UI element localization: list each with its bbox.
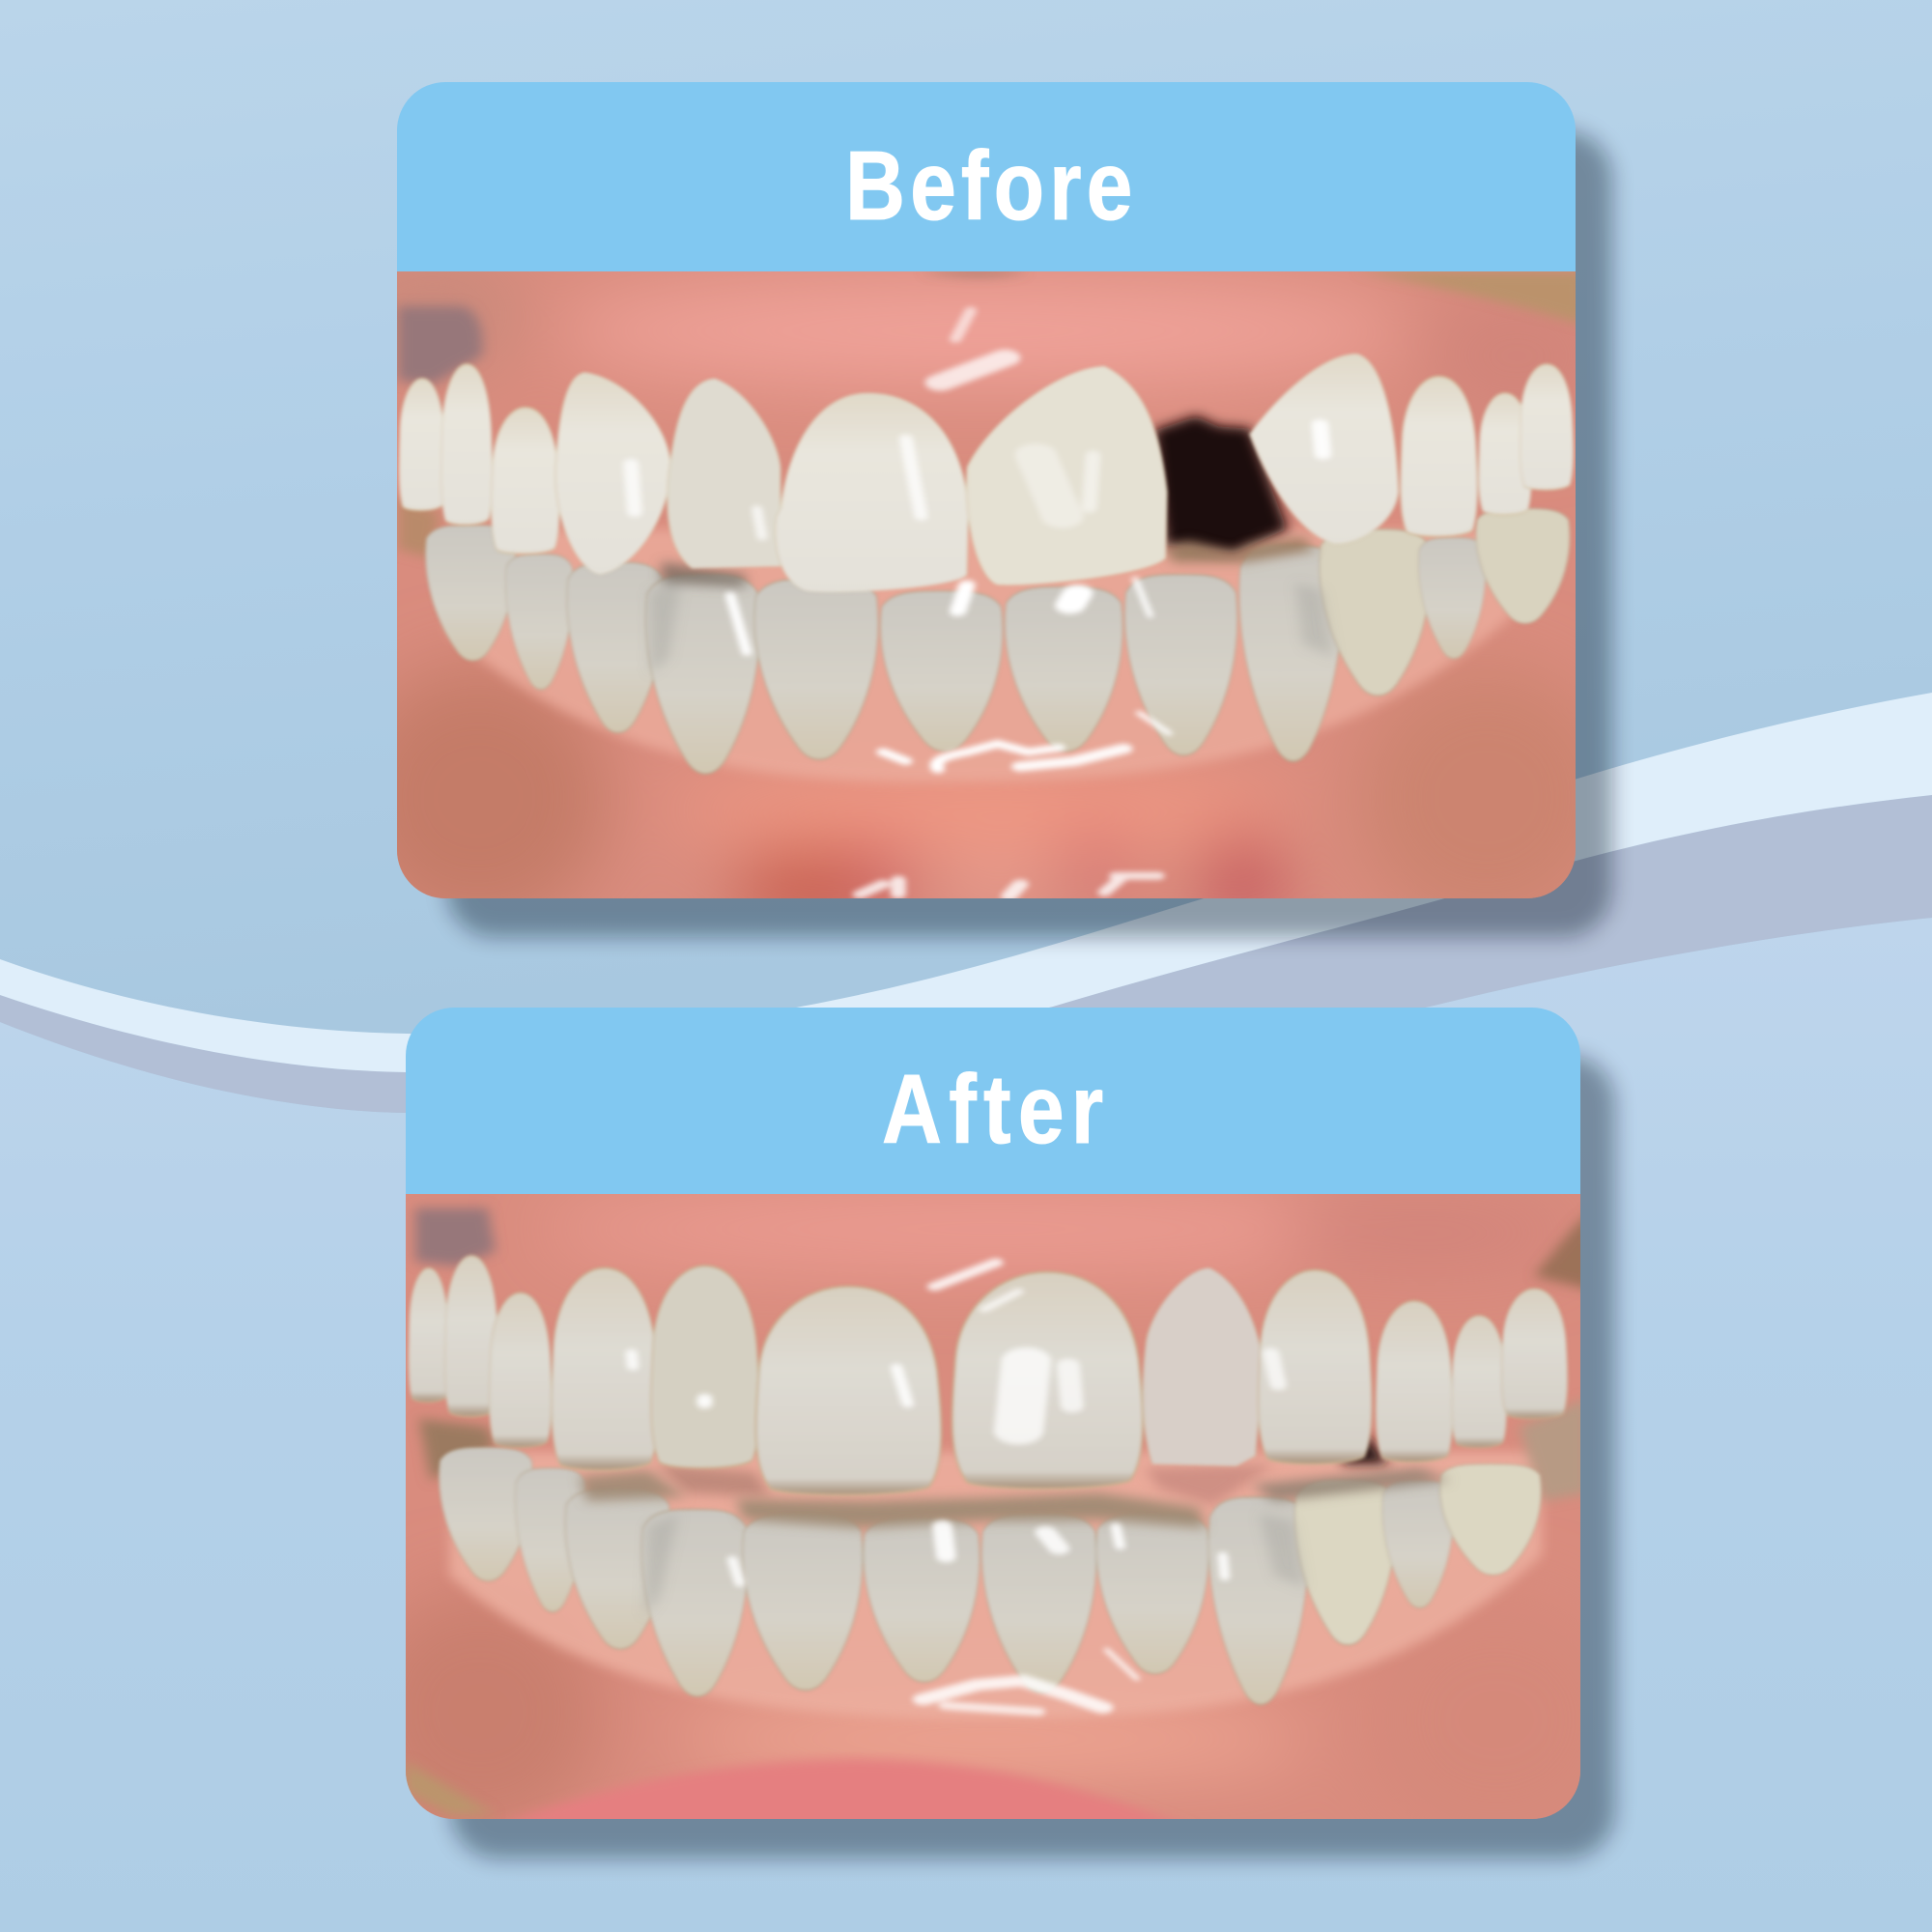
gums <box>406 1194 1580 1819</box>
aligner edge staining <box>580 1468 1450 1617</box>
photo: before <box>397 271 1576 898</box>
aligner film over lower gum <box>447 529 1517 782</box>
background details <box>405 1208 1594 1815</box>
gums <box>397 271 1576 898</box>
panel: before <box>341 82 1616 937</box>
card shadow: after <box>450 1055 1615 1859</box>
aligner edge staining <box>650 537 1334 673</box>
card shadow: before <box>446 130 1612 937</box>
lavender swoosh <box>0 795 1932 1114</box>
aligner film over lower gum <box>449 1452 1542 1719</box>
heading: After: After <box>882 1054 1110 1164</box>
upper teeth <box>409 1256 1568 1494</box>
highlights <box>632 1263 1278 1712</box>
white swoosh <box>0 693 1932 1072</box>
heading: Before: Before <box>845 130 1137 241</box>
upper teeth <box>399 354 1574 592</box>
background details <box>398 271 1584 558</box>
photo: after <box>406 1194 1580 1819</box>
lower background area <box>0 918 1932 1932</box>
lower teeth <box>440 1447 1541 1704</box>
highlights <box>631 310 1323 896</box>
header: after <box>406 1008 1580 1194</box>
lower teeth <box>426 508 1570 774</box>
header: before <box>397 82 1576 271</box>
lower lip <box>514 1756 1163 1819</box>
panel: after <box>357 1008 1626 1859</box>
